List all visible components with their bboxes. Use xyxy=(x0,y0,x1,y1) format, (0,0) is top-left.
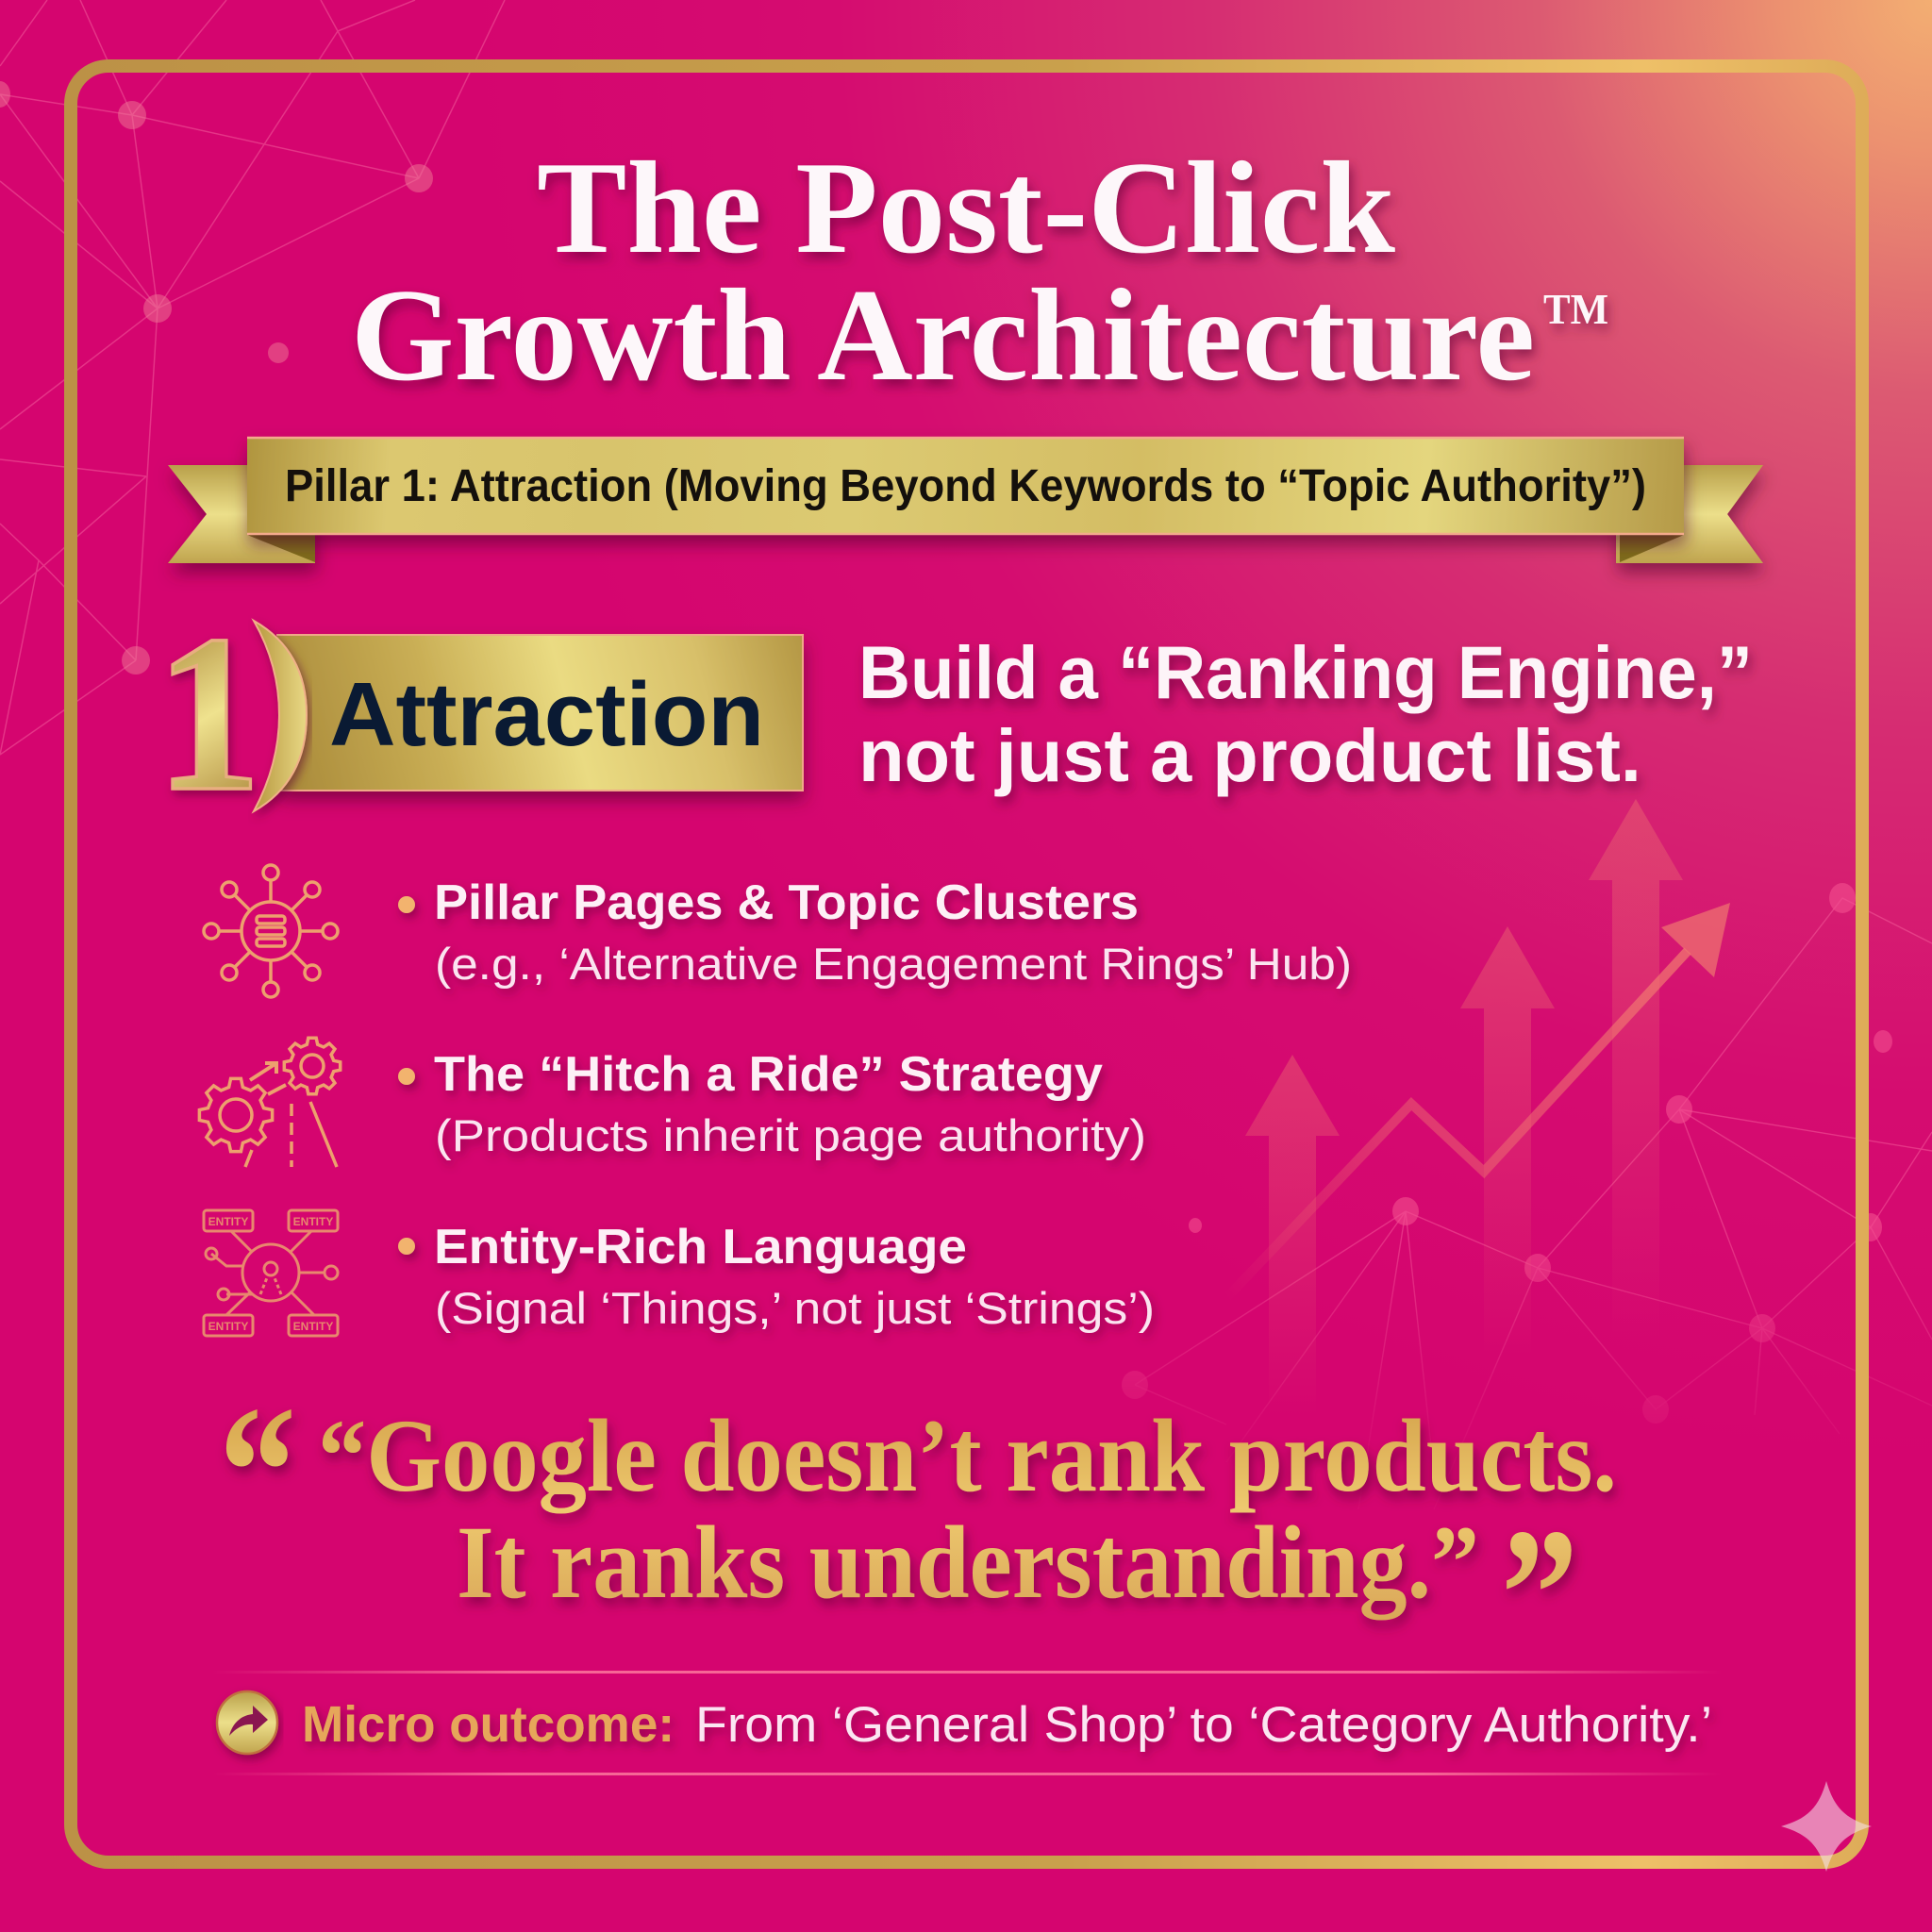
headline: not just a product list. xyxy=(858,713,1641,797)
divider rules xyxy=(212,1671,1722,1775)
icon: entity graph: ENTITY xyxy=(208,1215,248,1228)
list item: entity-rich language xyxy=(398,1220,1155,1333)
pillar ribbon xyxy=(168,437,1763,563)
quote: “ xyxy=(219,1368,296,1576)
list item: hitch a ride: The “Hitch a Ride” Strategy xyxy=(434,1047,1103,1102)
growth arrows and trend line xyxy=(1226,799,1730,1415)
quote: It ranks understanding.” xyxy=(457,1505,1479,1620)
numeral 1: 1 xyxy=(156,590,261,838)
icon: gears and road xyxy=(199,1038,341,1167)
headline: Build a “Ranking Engine,” xyxy=(858,630,1753,714)
quote xyxy=(219,1368,1617,1699)
quote: “Google doesn’t rank products. xyxy=(318,1398,1617,1513)
list item: entity-rich language: Entity-Rich Language xyxy=(434,1220,967,1274)
list item: pillar pages: (e.g., ‘Alternative Engagement Rings’ Hub) xyxy=(435,939,1352,989)
icon: entity graph xyxy=(204,1210,338,1336)
micro outcome text xyxy=(302,1696,1712,1753)
headline xyxy=(858,630,1753,797)
title: Growth Architecture xyxy=(351,262,1535,408)
list item: entity-rich language: (Signal ‘Things,’ not just ‘Strings’) xyxy=(435,1283,1155,1333)
title xyxy=(351,135,1608,408)
micro outcome text: From ‘General Shop’ to ‘Category Authority.’ xyxy=(695,1697,1712,1753)
icon: sparkle watermark xyxy=(1781,1781,1872,1872)
list item: hitch a ride xyxy=(398,1047,1146,1160)
icon: entity graph: ENTITY xyxy=(208,1320,248,1333)
network background: top left xyxy=(0,0,505,755)
icon: topic cluster hub xyxy=(204,865,338,997)
icon: micro outcome arrow badge xyxy=(217,1691,277,1754)
icon: entity graph: ENTITY xyxy=(293,1215,333,1228)
micro outcome text: Micro outcome: xyxy=(302,1696,675,1753)
list item: pillar pages xyxy=(398,875,1352,989)
title: The Post-Click xyxy=(537,135,1395,281)
network background: bottom right xyxy=(1122,883,1932,1436)
Attraction label: Attraction xyxy=(329,664,764,765)
ribbon label: Pillar 1: Attraction (Moving Beyond Keywords to “Topic Authority”) xyxy=(285,461,1646,511)
numbered Attraction banner xyxy=(156,590,803,838)
list item: hitch a ride: (Products inherit page authority) xyxy=(435,1110,1146,1160)
icon: entity graph: ENTITY xyxy=(293,1320,333,1333)
list item: pillar pages: Pillar Pages & Topic Clusters xyxy=(434,875,1139,930)
title: TM xyxy=(1543,285,1608,333)
quote: ” xyxy=(1501,1491,1578,1699)
